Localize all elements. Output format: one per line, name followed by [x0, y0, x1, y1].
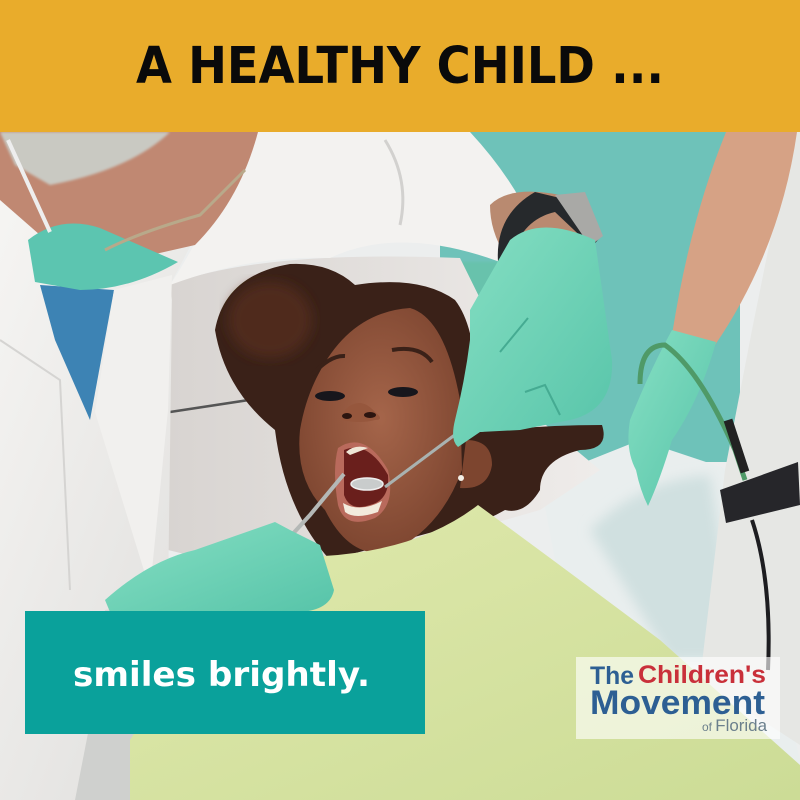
title: A HEALTHY CHILD ...: [136, 37, 664, 96]
suction hose and holder: [640, 345, 800, 670]
caption: smiles brightly.: [73, 655, 370, 695]
child face: [299, 308, 492, 553]
caption box: [25, 611, 425, 734]
logo: The Children's Movement of Florida: Movement: [590, 684, 765, 722]
logo: The Children's Movement of Florida: of Florida: [702, 716, 768, 735]
dentist coat: [0, 132, 532, 800]
child hair: [215, 264, 604, 560]
dentist left glove: [105, 522, 334, 612]
watch and wrist: [490, 192, 603, 262]
open mouth: [335, 442, 390, 522]
logo: The Children's Movement of Florida: Children's: [638, 661, 766, 689]
dental chair headrest: [60, 257, 600, 800]
top banner: [0, 0, 800, 132]
assistant glove: [628, 330, 716, 506]
dental instruments: [278, 434, 456, 550]
assistant arm and coat: [672, 132, 800, 745]
logo: The Children's Movement of Florida: [576, 657, 780, 739]
child bib: [130, 505, 800, 800]
dentist head: [0, 132, 258, 290]
dentist right glove holding mirror: [453, 228, 612, 447]
logo: The Children's Movement of Florida: The: [590, 662, 634, 690]
